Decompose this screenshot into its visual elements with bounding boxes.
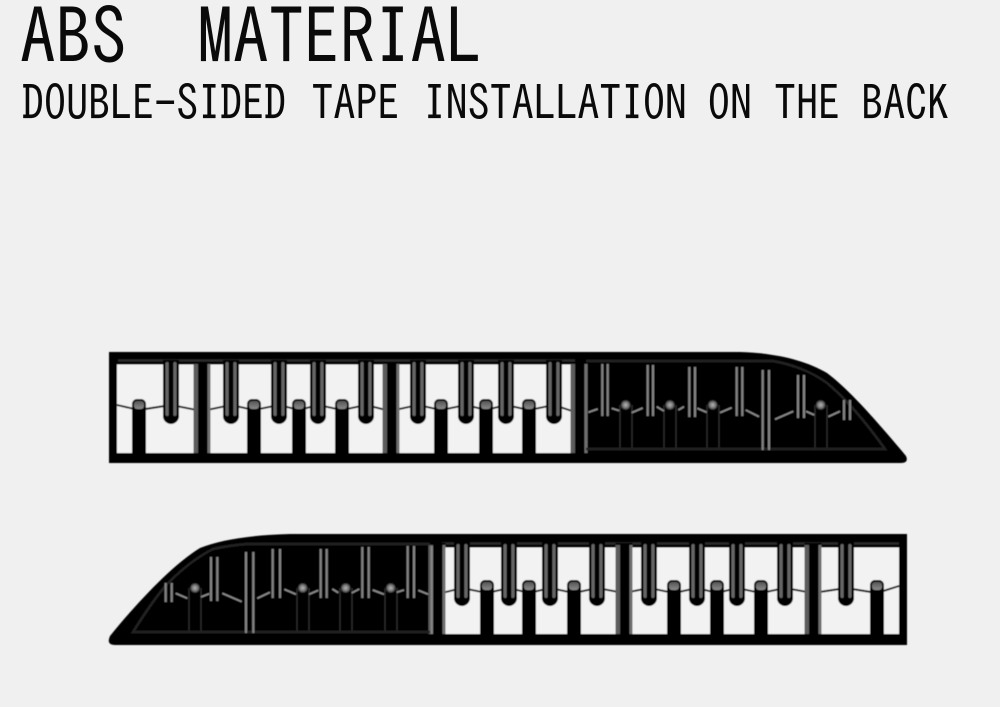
bottom piece: outer frame (109, 534, 907, 645)
top piece: open white section (117, 364, 575, 453)
bottom piece: black section round pins (190, 583, 396, 593)
bottom piece: connector line (442, 586, 899, 593)
top piece: black section grey slats (602, 364, 850, 450)
subtitle: DOUBLE-SIDED TAPE INSTALLATION ON THE BACK (22, 78, 949, 127)
top piece: black section post stems (620, 405, 827, 450)
top piece: rising posts (132, 399, 536, 456)
bottom piece: open white section (442, 548, 899, 634)
top piece: black section inner outline (586, 361, 885, 449)
top piece: outer frame (109, 352, 907, 463)
top piece: black section round pins (621, 400, 826, 410)
bottom piece: dividers (428, 543, 822, 635)
top piece: hanging slats (163, 360, 562, 424)
bottom piece: hanging slats (454, 542, 854, 606)
bottom piece: black section grey slats (166, 546, 432, 634)
top piece: upper frame highlight (118, 359, 575, 362)
bottom piece: black section inner outline (133, 544, 430, 632)
top piece: black section grey links (588, 407, 840, 419)
bottom piece: rising posts (480, 580, 884, 637)
bottom trim piece (109, 534, 907, 645)
top piece: dividers (194, 362, 588, 454)
top piece: connector line (117, 405, 572, 411)
bottom piece: black section post stems (189, 588, 397, 632)
top trim piece (109, 352, 907, 463)
bottom piece: upper frame highlight (442, 542, 899, 545)
bottom piece: black section grey links (176, 589, 428, 602)
